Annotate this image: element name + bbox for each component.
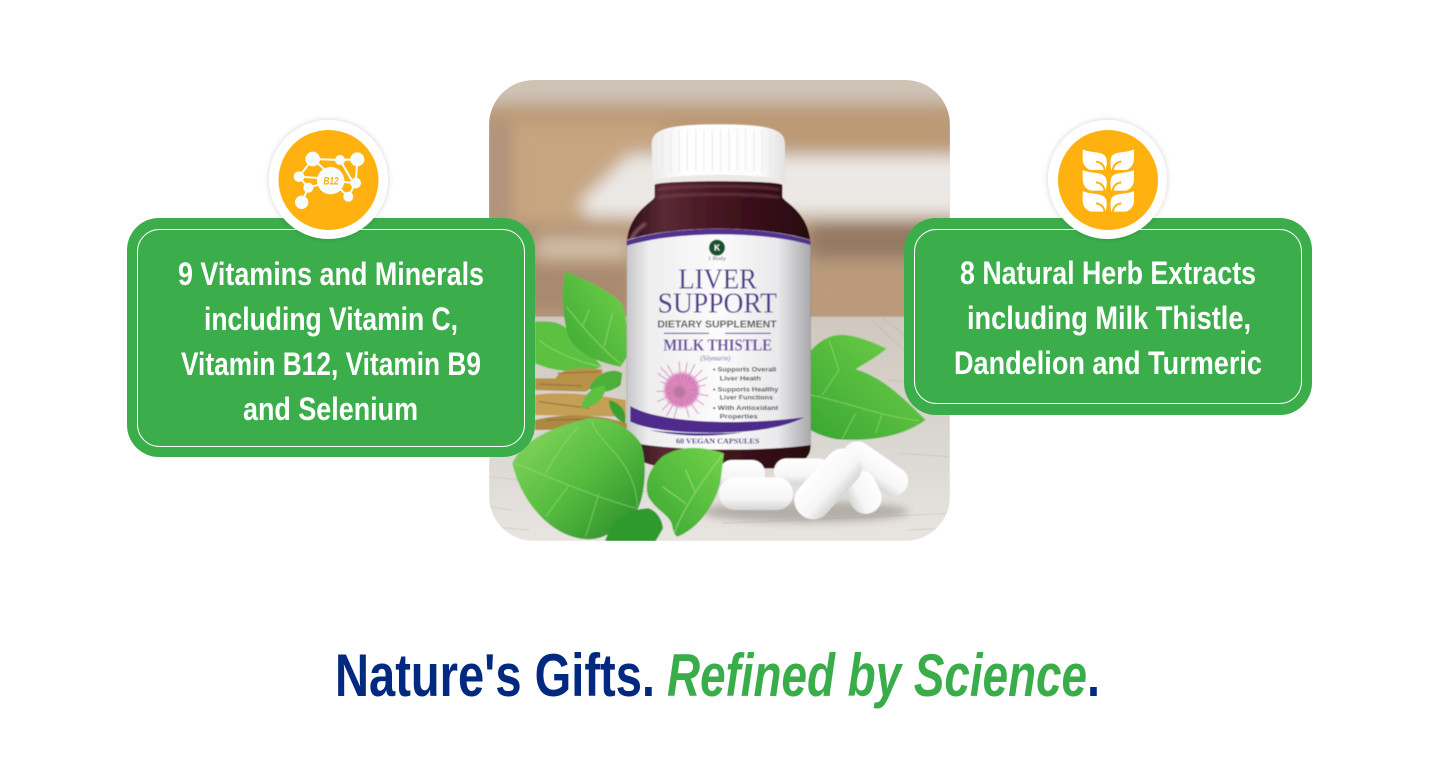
table planks	[489, 317, 950, 530]
bottle label: 60 VEGAN CAPSULES	[676, 437, 759, 445]
icon: B12 molecule badge	[269, 120, 388, 239]
bottle label: K	[714, 244, 720, 253]
benefit bullets: • With Antioxidant	[713, 405, 779, 412]
benefit bullets: Liver Heath	[720, 375, 761, 382]
benefit bullets	[713, 367, 779, 421]
bottle label: 1 Body	[708, 256, 726, 262]
benefit bullets: • Supports Overall	[713, 367, 776, 374]
wooden table	[489, 317, 950, 541]
brand logo	[709, 240, 725, 256]
small sprig leaves	[581, 371, 626, 423]
leaf: large front	[512, 418, 645, 539]
tagline: Refined by Science	[667, 642, 1087, 709]
purple swoosh	[630, 406, 804, 433]
bottle label: SUPPORT	[658, 288, 777, 320]
right callout text: 8 Natural Herb Extracts	[960, 255, 1256, 291]
product name: LIVER	[678, 263, 758, 295]
thistle flower	[656, 362, 708, 418]
blurred kitchen background	[489, 80, 950, 318]
right callout: natural herb extracts	[904, 218, 1312, 415]
tagline: .	[1087, 642, 1100, 709]
bottle label	[627, 229, 811, 450]
right callout text: including Milk Thistle,	[967, 300, 1251, 336]
roots	[535, 368, 627, 430]
left callout text: and Selenium	[243, 391, 418, 427]
icon: B12 molecule badge: B12	[323, 176, 339, 188]
tagline	[335, 642, 1100, 709]
bottle cap	[652, 124, 785, 182]
capsule shadow	[702, 501, 909, 522]
bottle label: (Silymarin)	[700, 354, 731, 363]
benefit bullets: Properties	[720, 414, 758, 421]
benefit bullets: Liver Functions	[720, 394, 773, 401]
photo: milk thistle supplement bottle on a table	[472, 63, 966, 541]
right callout text: Dandelion and Turmeric	[954, 345, 1262, 381]
leaf: bottom sprig	[605, 508, 663, 541]
right callout text	[954, 255, 1262, 381]
left callout text: 9 Vitamins and Minerals	[178, 256, 484, 292]
left callout text	[178, 256, 484, 427]
leaf: right	[811, 335, 926, 440]
capsules	[718, 441, 908, 520]
icon: herb leaves badge	[1048, 120, 1167, 239]
left callout text: Vitamin B12, Vitamin B9	[181, 346, 481, 382]
leaf: left back	[535, 272, 627, 371]
tagline: Nature's Gifts.	[335, 642, 655, 709]
bottle label: DIETARY SUPPLEMENT	[657, 320, 777, 331]
bottle glass	[627, 181, 811, 468]
bottle label: MILK THISTLE	[663, 336, 772, 355]
leaf: small front	[647, 448, 724, 537]
left callout: vitamins and minerals	[127, 218, 535, 457]
bottle	[627, 124, 811, 468]
benefit bullets: • Supports Healthy	[713, 386, 779, 393]
left callout text: including Vitamin C,	[204, 301, 458, 337]
